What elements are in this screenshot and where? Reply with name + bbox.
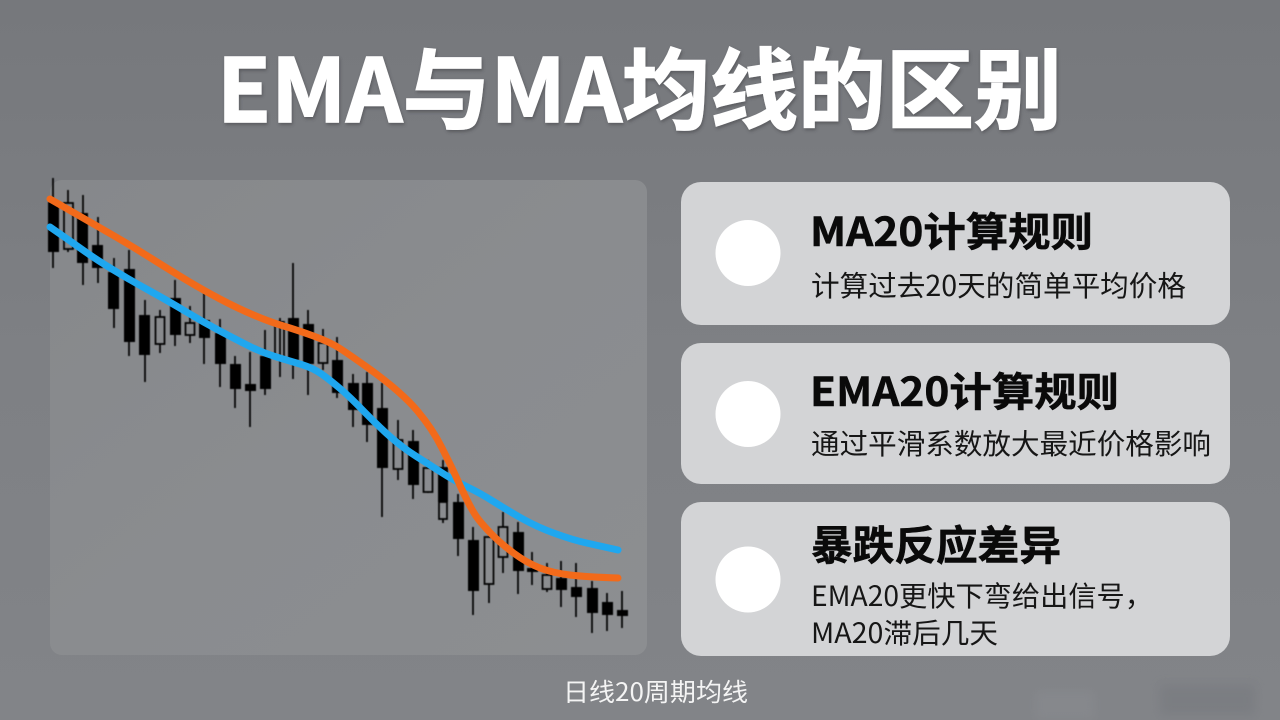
- panel: EMA20 rule: [681, 343, 1230, 484]
- icon: white circle: [716, 381, 780, 447]
- heading: MA20: MA20计算规则: [810, 200, 1093, 258]
- heading: EMA20: EMA20计算规则: [810, 360, 1119, 418]
- line: blue MA20: [50, 227, 618, 550]
- candlesticks: [48, 178, 628, 633]
- text: crash reaction description: EMA20更快下弯给出信号，: [811, 575, 1153, 615]
- panel: crash reaction difference: [681, 502, 1230, 656]
- heading: crash reaction: 暴跌反应差异: [811, 512, 1061, 572]
- text: EMA20 description: 通过平滑系数放大最近价格影响: [811, 422, 1211, 463]
- icon: white circle: [716, 546, 780, 612]
- line: orange EMA20: [50, 199, 618, 578]
- title: EMA与MA均线的区别: [217, 21, 1062, 148]
- text: MA20 description: 计算过去20天的简单平均价格: [811, 264, 1186, 305]
- panel: candlestick chart: [48, 178, 647, 655]
- text: crash reaction description: MA20滞后几天: [811, 612, 998, 652]
- icon: white circle: [716, 220, 780, 286]
- text: crash reaction description: [811, 575, 1153, 652]
- panel: MA20 rule: [681, 182, 1230, 325]
- caption: 日线20周期均线: [563, 673, 748, 709]
